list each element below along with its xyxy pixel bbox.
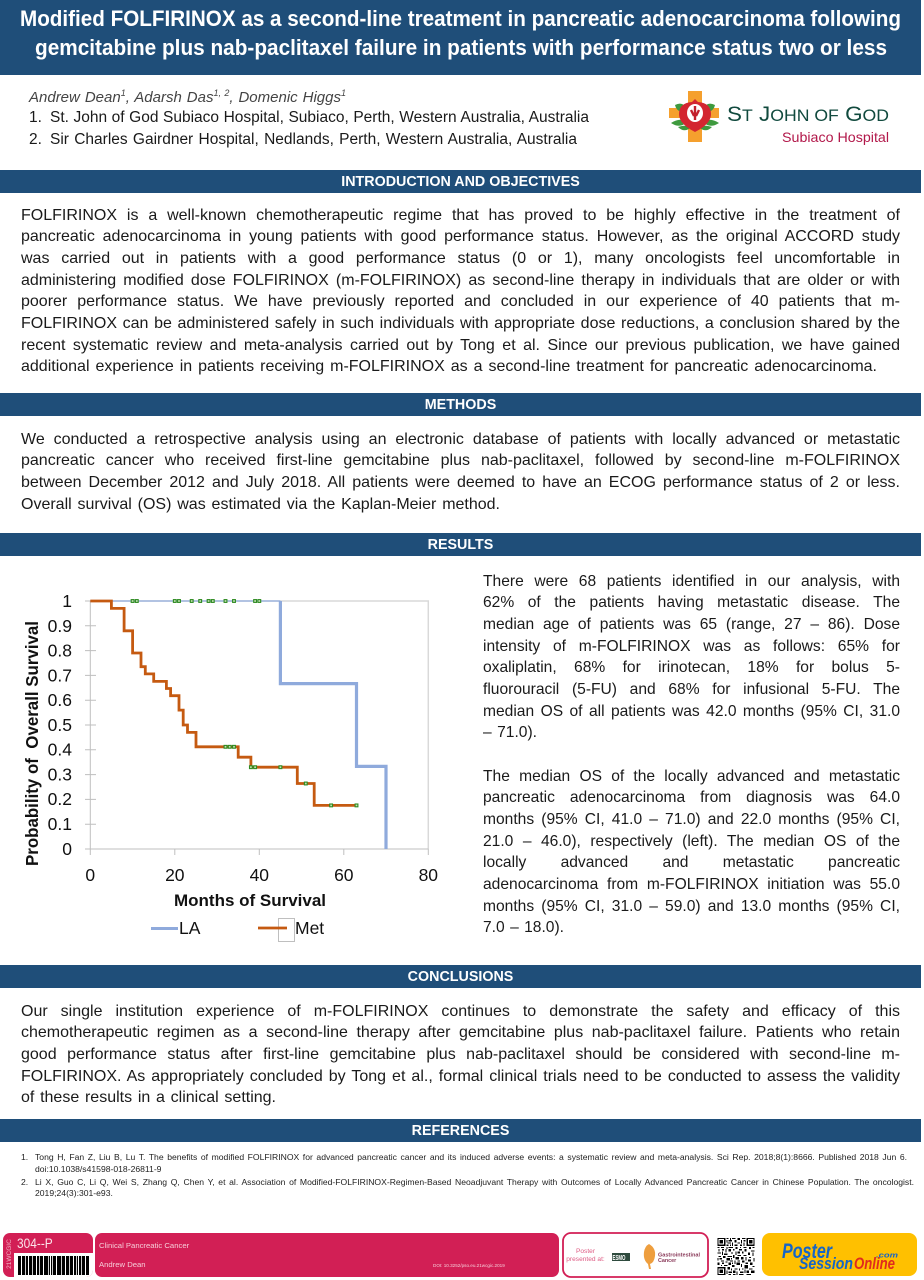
reference list: doi:10.1038/s41598-018-26811-9: [35, 1164, 161, 1174]
footer: PosterSessionOnline logo: .com: [876, 1250, 898, 1260]
footer: PosterSessionOnline logo: [762, 1233, 917, 1276]
text block: results: 62% of the patients having metastatic disease. The: [483, 594, 900, 611]
text block: results: months (95% CI, 41.0 – 71.0) and 22.0 months (95% CI,: [483, 811, 900, 828]
footer: poster ID badge: [3, 1233, 93, 1277]
text block: results: 7.0 – 18.0).: [483, 919, 564, 936]
authors and affiliations: St. John of God Subiaco Hospital, Subiaco, Perth, Western Australia, Australia: [50, 109, 589, 126]
text block: results: oxaliplatin, 68% for irinotecan, 18% for bolus 5-: [483, 659, 900, 676]
x axis tick labels: 60: [334, 865, 354, 885]
y axis tick labels: 0.6: [48, 690, 72, 710]
text block: results: [483, 572, 900, 936]
y axis tick labels: 1: [62, 591, 72, 611]
footer: PosterSessionOnline logo: Session: [799, 1254, 853, 1273]
section heading: results: RESULTS: [428, 537, 493, 553]
text block: results: 21.0 – 46.0), respectively (left). The median OS of the: [483, 833, 900, 850]
footer: topic and presenter band: DOI: 10.3252/pso.eu.21wcgic.2019: [433, 1263, 505, 1268]
y axis tick labels: 0.8: [48, 640, 72, 660]
text block: conclusions: FOLFIRINOX. As appropriately concluded by Tong et al., formal clinical trials need to be conducted to assess the validity: [21, 1068, 900, 1085]
y axis tick labels: 0.2: [48, 789, 72, 809]
x axis title: Months of Survival: [174, 891, 326, 910]
footer: presented at ESMO congress: ESMO: [612, 1255, 626, 1262]
footer: topic and presenter band: Clinical Pancreatic Cancer: [99, 1241, 189, 1250]
y axis title: Probability of Overall Survival: [22, 621, 42, 866]
authors and affiliations: 1.: [29, 109, 42, 126]
x axis tick labels: [85, 865, 438, 885]
text block: results: median age of patients was 65 (range, 27 – 86). Dose: [483, 616, 900, 633]
text block: methods: [21, 430, 900, 513]
reference list: 2.: [21, 1177, 28, 1187]
text block: results: months (95% CI, 31.0 – 59.0) and 13.0 months (95% CI,: [483, 898, 900, 915]
x axis tick labels: 0: [85, 865, 95, 885]
x axis tick labels: 80: [419, 865, 438, 885]
text block: results: locally advanced and metastatic pancreatic: [483, 854, 900, 871]
reference list: Li X, Guo C, Li Q, Wei S, Zhang Q, Chen Y, et al. Association of Modified-FOLFIRINOX-Regimen-Based Neoadjuvant Therapy with Outcomes of Locally Advanced Pancreatic Cancer in Chinese Population. The oncologist.: [35, 1177, 914, 1187]
text block: introduction: FOLFIRINOX is a well-known chemotherapeutic regime that has proved to be highly effective in the treatment of: [21, 206, 900, 224]
section heading: conclusions: CONCLUSIONS: [408, 969, 513, 985]
x axis tick labels: 20: [165, 865, 185, 885]
authors and affiliations: Sir Charles Gairdner Hospital, Nedlands, Perth, Western Australia, Australia: [50, 131, 577, 148]
logo: St John of God Subiaco Hospital: Subiaco Hospital: [782, 129, 889, 145]
footer: poster ID badge: 21WCGIC: [6, 1239, 13, 1269]
text block: results: intensity of m-FOLFIRINOX was as follows: 65% for: [483, 638, 900, 655]
legend: [151, 918, 324, 942]
footer: presented at ESMO congress: Cancer: [658, 1258, 677, 1264]
text block: results: The median OS of the locally advanced and metastatic: [483, 768, 900, 785]
logo: St John of God Subiaco Hospital: [669, 91, 889, 145]
text block: results: median OS of all patients was 42.0 months (95% CI, 31.0: [483, 703, 900, 720]
section heading: introduction: [0, 170, 921, 193]
footer: presented at ESMO congress: presented at:: [566, 1256, 605, 1263]
legend: LA: [179, 918, 201, 938]
reference list: [21, 1152, 914, 1198]
text block: introduction: [21, 206, 900, 375]
text block: methods: Overall survival (OS) was estimated via the Kaplan-Meier method.: [21, 496, 500, 513]
curve: locally advanced (LA): [90, 601, 386, 849]
y axis tick labels: [48, 591, 72, 859]
text block: results: adenocarcinoma from m-FOLFIRINOX initiation was 55.0: [483, 876, 900, 893]
footer: poster ID badge: 304--P: [17, 1235, 53, 1251]
legend: Met: [295, 918, 324, 938]
y axis tick labels: 0.1: [48, 814, 72, 834]
footer: topic and presenter band: [95, 1233, 559, 1277]
footer: PosterSessionOnline logo: Poster: [782, 1240, 833, 1263]
title banner: gemcitabine plus nab-paclitaxel failure in patients with performance status two or less: [35, 35, 887, 60]
text block: results: pancreatic adenocarcinoma from diagnosis was 64.0: [483, 789, 900, 806]
footer: PosterSessionOnline logo: Online: [854, 1254, 895, 1273]
y axis tick labels: 0.3: [48, 764, 72, 784]
section heading: references: REFERENCES: [412, 1123, 509, 1139]
barcode: [18, 1256, 89, 1275]
section heading: methods: METHODS: [425, 397, 496, 413]
text block: results: fluorouracil (5-FU) and 68% for infusional 5-FU. The: [483, 681, 900, 698]
y axis tick labels: 0.9: [48, 616, 72, 636]
text block: introduction: was carried out in patients with a good performance status (0 or 1), many oncologists feel uncomfortable in: [21, 250, 900, 267]
text block: conclusions: chemotherapeutic regimen as a second-line therapy after gemcitabine plus nab-paclitaxel failure. Patients who retain: [21, 1024, 900, 1041]
text block: conclusions: Our single institution experience of m-FOLFIRINOX continues to demonstrate the safety and efficacy of this: [21, 1002, 900, 1020]
x axis tick labels: 40: [250, 865, 269, 885]
logo: St John of God Subiaco Hospital: ST JOHN OF GOD: [727, 103, 889, 126]
section heading: introduction: INTRODUCTION AND OBJECTIVES: [341, 174, 580, 190]
reference list: 2019;24(3):301-e93.: [35, 1188, 113, 1198]
chart: Kaplan-Meier overall survival: [22, 591, 438, 942]
text block: methods: We conducted a retrospective analysis using an electronic database of patients with locally advanced or metastatic: [21, 430, 900, 448]
section heading: results: [0, 533, 921, 556]
authors and affiliations: [28, 88, 589, 148]
footer: presented at ESMO congress: Poster: [576, 1248, 596, 1255]
footer: presented at ESMO congress: Gastrointestinal: [658, 1252, 701, 1258]
y axis tick labels: 0.7: [48, 666, 72, 686]
text block: conclusions: of these results in a clinical setting.: [21, 1089, 276, 1106]
text block: methods: between December 2012 and July 2018. All patients were deemed to have an ECOG performance status of 2 or less.: [21, 474, 900, 491]
text block: introduction: additional experience in patients receiving m-FOLFIRINOX as a second-line treatment for pancreatic adenocarcinoma.: [21, 358, 877, 375]
text block: methods: pancreatic cancer who received first-line gemcitabine plus nab-paclitaxel, followed by second-line m-FOLFIRINOX: [21, 452, 900, 469]
authors and affiliations: 2.: [29, 131, 42, 148]
text block: conclusions: good performance status after first-line gemcitabine plus nab-paclitaxel should be considered with second-line m-: [21, 1046, 900, 1063]
text block: conclusions: [21, 1002, 900, 1106]
text block: results: There were 68 patients identified in our analysis, with: [483, 572, 900, 590]
censor marks: [131, 600, 358, 807]
text block: introduction: administering modified dose FOLFIRINOX (m-FOLFIRINOX) as second-line therapy in individuals that are older or with: [21, 272, 900, 289]
section heading: references: [0, 1119, 921, 1142]
footer: presented at ESMO congress: [562, 1232, 709, 1278]
reference list: Tong H, Fan Z, Liu B, Lu T. The benefits of modified FOLFIRINOX for advanced pancreatic cancer and its induced adverse events: a systematic review and meta-analysis. Sci Rep. 2018;8(1):8666. Published 2018 Jun 6.: [35, 1152, 907, 1162]
footer: QR code: [717, 1238, 755, 1275]
authors and affiliations: Andrew Dean1, Adarsh Das1, 2, Domenic Higgs1: [29, 88, 346, 106]
text block: introduction: pancreatic adenocarcinoma in young patients with good performance status. However, as the original ACCORD study: [21, 228, 900, 245]
title banner: [0, 0, 921, 75]
section heading: conclusions: [0, 965, 921, 988]
reference list: 1.: [21, 1152, 28, 1162]
y axis tick labels: 0.4: [48, 740, 72, 760]
curve: metastatic (Met): [90, 601, 357, 805]
footer: topic and presenter band: Andrew Dean: [99, 1260, 146, 1269]
text block: results: – 71.0).: [483, 724, 537, 741]
section heading: methods: [0, 393, 921, 416]
y axis tick labels: 0: [62, 839, 72, 859]
text block: introduction: FOLFIRINOX can be administered safely in such individuals with appropriate dose reductions, a conclusion shared by the: [21, 315, 900, 332]
text block: introduction: recent systematic review and meta-analysis carried out by Tong et al. Since our previous publication, we have gained: [21, 337, 900, 354]
y axis tick labels: 0.5: [48, 715, 72, 735]
text block: introduction: poorer performance status. We have previously reported and concluded in our experience of 40 patients that m-: [21, 293, 900, 310]
